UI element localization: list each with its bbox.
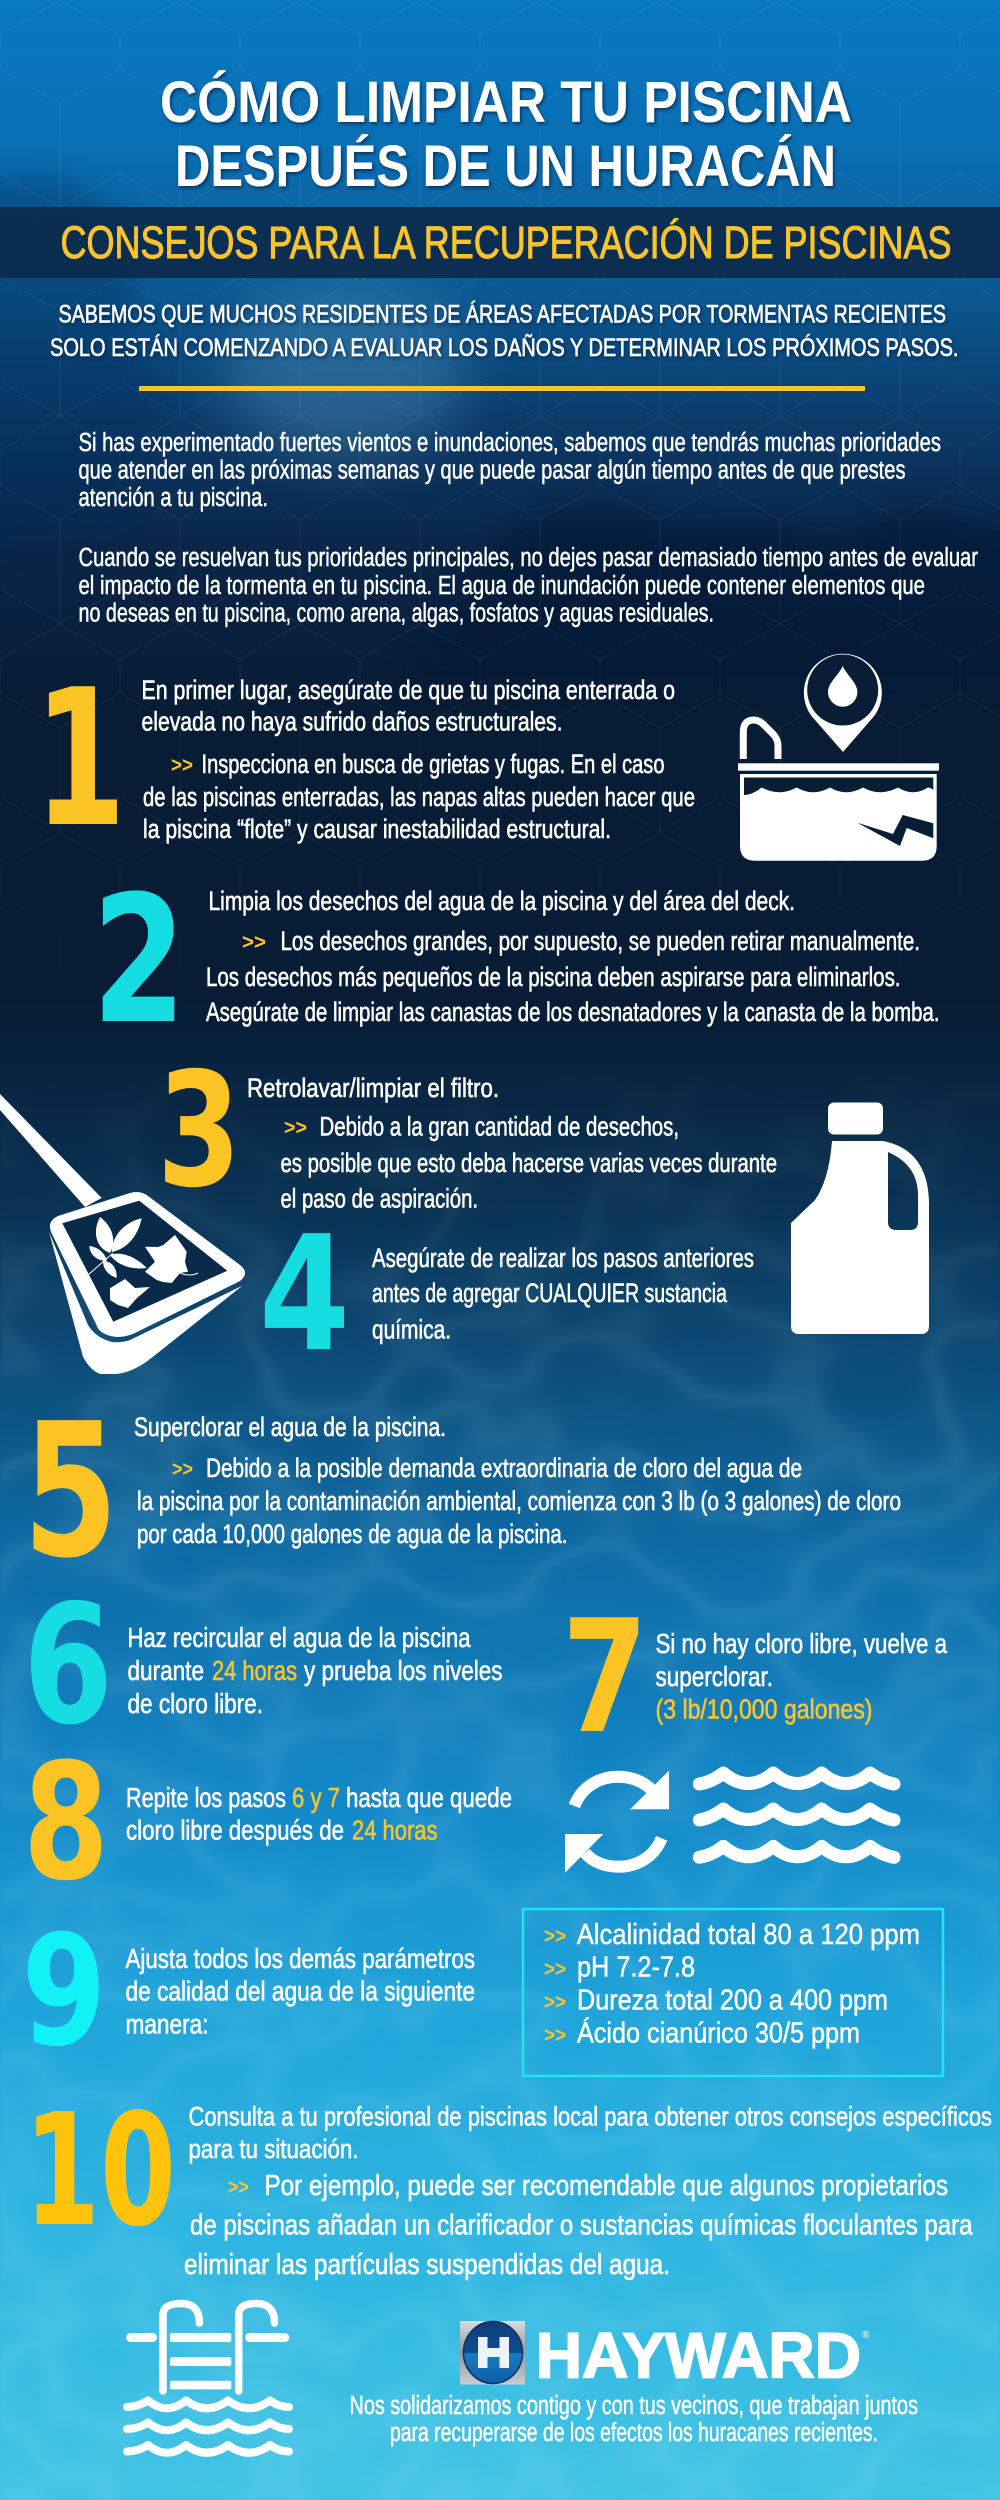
step 9 number: 9 — [22, 1903, 106, 2081]
panel: water chemistry parameters: >> — [544, 1958, 566, 1981]
step 4 text: Asegúrate de realizar los pasos anteriores — [372, 1243, 754, 1273]
panel: water chemistry parameters — [523, 1909, 943, 2076]
panel: water chemistry parameters: >> — [544, 2024, 566, 2047]
title — [160, 70, 852, 199]
step 10 text: eliminar las partículas suspendidas del agua. — [184, 2249, 670, 2281]
panel: water chemistry parameters: Ácido cianúrico 30/5 ppm — [577, 2016, 860, 2050]
intro paragraph 1 — [78, 429, 941, 512]
step 2 text: >> — [242, 931, 266, 954]
step 1 text: de las piscinas enterradas, las napas altas pueden hacer que — [143, 782, 695, 812]
step 5 number: 5 — [23, 1383, 118, 1599]
step 4 number: 4 — [259, 1202, 350, 1387]
step 2 number: 2 — [92, 858, 186, 1063]
intro paragraph 1: atención a tu piscina. — [78, 484, 268, 512]
step 1 text: >> — [171, 754, 193, 777]
step 10 text — [184, 2102, 992, 2281]
step 5 text — [134, 1412, 901, 1549]
panel: water chemistry parameters: Alcalinidad total 80 a 120 ppm — [577, 1919, 920, 1951]
step 8 text: cloro libre después de — [126, 1814, 344, 1846]
step 5 text: por cada 10,000 galones de agua de la piscina. — [137, 1519, 568, 1549]
step 1 text: En primer lugar, asegúrate de que tu piscina enterrada o — [142, 675, 675, 705]
icon: recirculation arrows — [565, 1771, 669, 1873]
icon: pool ladder in water — [126, 2304, 289, 2453]
step 1 text — [142, 675, 695, 844]
step 8 text — [126, 1782, 512, 1846]
step 3 text: Debido a la gran cantidad de desechos, — [320, 1112, 679, 1142]
intro paragraph 2: no deseas en tu piscina, como arena, algas, fosfatos y aguas residuales. — [78, 600, 714, 628]
step 6 text: 24 horas — [212, 1655, 297, 1686]
title: CÓMO LIMPIAR TU PISCINA — [160, 70, 852, 135]
step 4 text: química. — [372, 1314, 451, 1344]
logo: Hayward: HAYWARD — [536, 2320, 861, 2392]
yellow divider — [139, 386, 865, 391]
step 3 text: >> — [284, 1116, 307, 1140]
step 9 text: manera: — [126, 2008, 208, 2040]
step 8 text: hasta que quede — [346, 1782, 512, 1813]
panel: water chemistry parameters: >> — [544, 1991, 566, 2014]
step 4 text: antes de agregar CUALQUIER sustancia — [372, 1278, 727, 1308]
step 9 text: de calidad del agua de la siguiente — [126, 1976, 475, 2006]
icon: skimmer net with leaves — [0, 1094, 245, 1374]
step 6 text: durante — [128, 1655, 204, 1686]
step 7 text: (3 lb/10,000 galones) — [656, 1694, 872, 1724]
panel: water chemistry parameters: pH 7.2-7.8 — [577, 1952, 695, 1984]
intro statement — [50, 300, 958, 362]
step 5 text: >> — [172, 1458, 193, 1481]
step 7 text: superclorar. — [656, 1661, 773, 1692]
step 3 text — [247, 1073, 777, 1214]
step 8 number: 8 — [23, 1729, 109, 1916]
step 3 text: Retrolavar/limpiar el filtro. — [247, 1073, 499, 1103]
step 6 text: Haz recircular el agua de la piscina — [128, 1622, 471, 1653]
step 8 text: 24 horas — [352, 1814, 438, 1846]
step 3 text: es posible que esto deba hacerse varias veces durante — [280, 1148, 777, 1178]
step 10 number: 10 — [24, 2080, 176, 2261]
step 6 text — [128, 1622, 502, 1719]
step 9 text — [126, 1943, 475, 2040]
step 6 text: de cloro libre. — [128, 1688, 263, 1719]
title: DESPUÉS DE UN HURACÁN — [175, 134, 836, 199]
step 6 number: 6 — [23, 1569, 113, 1761]
panel: water chemistry parameters: Dureza total 200 a 400 ppm — [577, 1984, 888, 2016]
step 4 text — [372, 1243, 754, 1344]
step 5 text: Debido a la posible demanda extraordinaria de cloro del agua de — [206, 1453, 802, 1483]
step 1 text: elevada no haya sufrido daños estructurales. — [142, 706, 562, 736]
step 3 text: el paso de aspiración. — [280, 1184, 478, 1214]
logo: Hayward: ® — [862, 2330, 870, 2341]
step 1 number: 1 — [34, 649, 126, 869]
step 5 text: Superclorar el agua de la piscina. — [134, 1412, 446, 1442]
intro paragraph 2 — [78, 544, 978, 628]
step 10 text: >> — [228, 2176, 249, 2199]
step 6 text: y prueba los niveles — [304, 1655, 502, 1686]
step 7 number: 7 — [562, 1586, 648, 1768]
step 9 text: Ajusta todos los demás parámetros — [126, 1943, 475, 1974]
step 1 text: la piscina “flote” y causar inestabilidad estructural. — [143, 814, 611, 844]
step 8 text: Repite los pasos — [126, 1782, 286, 1813]
step 2 text: Limpia los desechos del agua de la piscina y del área del deck. — [208, 886, 795, 916]
panel: water chemistry parameters: >> — [544, 1925, 566, 1948]
icon: pool with crack and water pin — [738, 654, 939, 861]
step 10 text: para tu situación. — [188, 2134, 358, 2164]
step 3 number: 3 — [157, 1039, 241, 1223]
footer message — [350, 2392, 918, 2447]
step 8 text: 6 y 7 — [292, 1782, 340, 1813]
subtitle band — [0, 207, 1000, 278]
icon: chemical bottle — [791, 1102, 929, 1334]
icon: three water waves — [699, 1773, 894, 1857]
step 7 text — [656, 1628, 947, 1724]
step 1 text: Inspecciona en busca de grietas y fugas. En el caso — [202, 749, 664, 779]
step 2 text — [206, 886, 940, 1027]
